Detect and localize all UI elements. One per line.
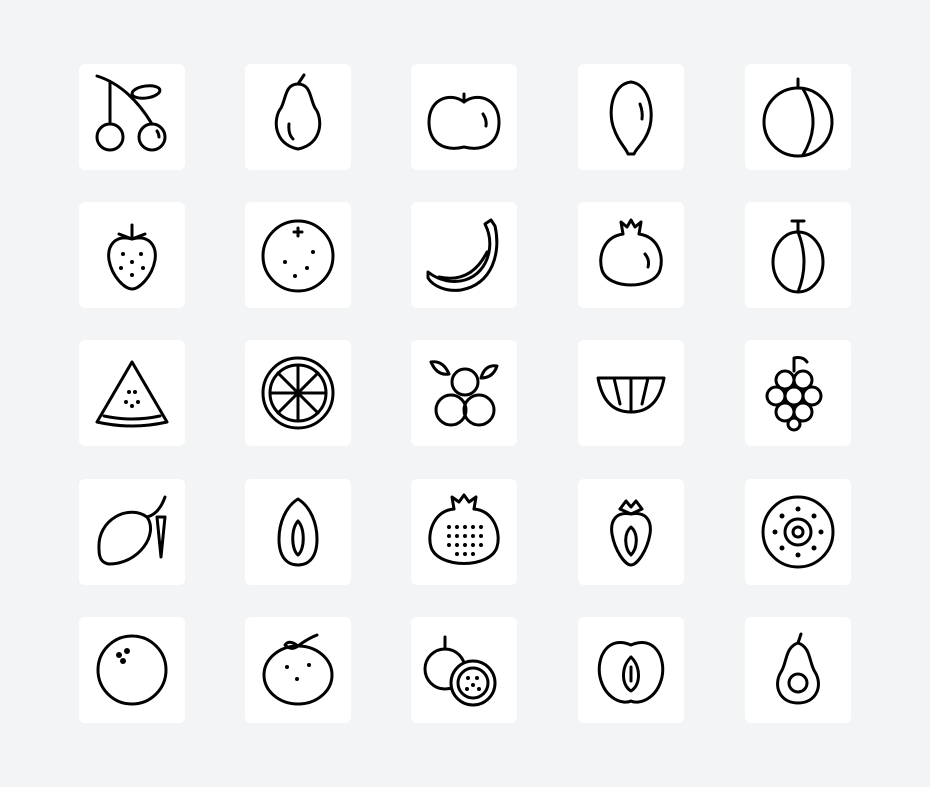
icon: cherry [97,76,165,150]
icon: coconut [98,636,166,704]
icon: berries [431,362,497,425]
icon: plum [764,79,832,156]
icon: orange [263,221,333,291]
icon: avocado [778,634,818,703]
icon: tangerine [264,635,332,704]
icon: pomegranate [601,220,661,285]
icon: banana [428,220,497,290]
icon: pomegranate cut [430,495,498,564]
icon: strawberry [109,225,155,289]
icon: kiwi [763,497,833,567]
icon: lemon [611,82,651,154]
icon: passion fruit [425,637,495,705]
icon: peach half [599,643,663,702]
icon: strawberry cut [612,501,650,565]
icon: watermelon slice [97,362,167,426]
icon: apple [429,94,499,148]
icon: mango [99,497,165,564]
icon: pear [276,75,320,149]
icon: apricot [773,221,823,292]
icon: orange slice half [598,378,664,412]
icon: papaya [279,499,317,565]
icon: grapes [767,358,821,430]
icon: citrus slice [263,358,333,428]
